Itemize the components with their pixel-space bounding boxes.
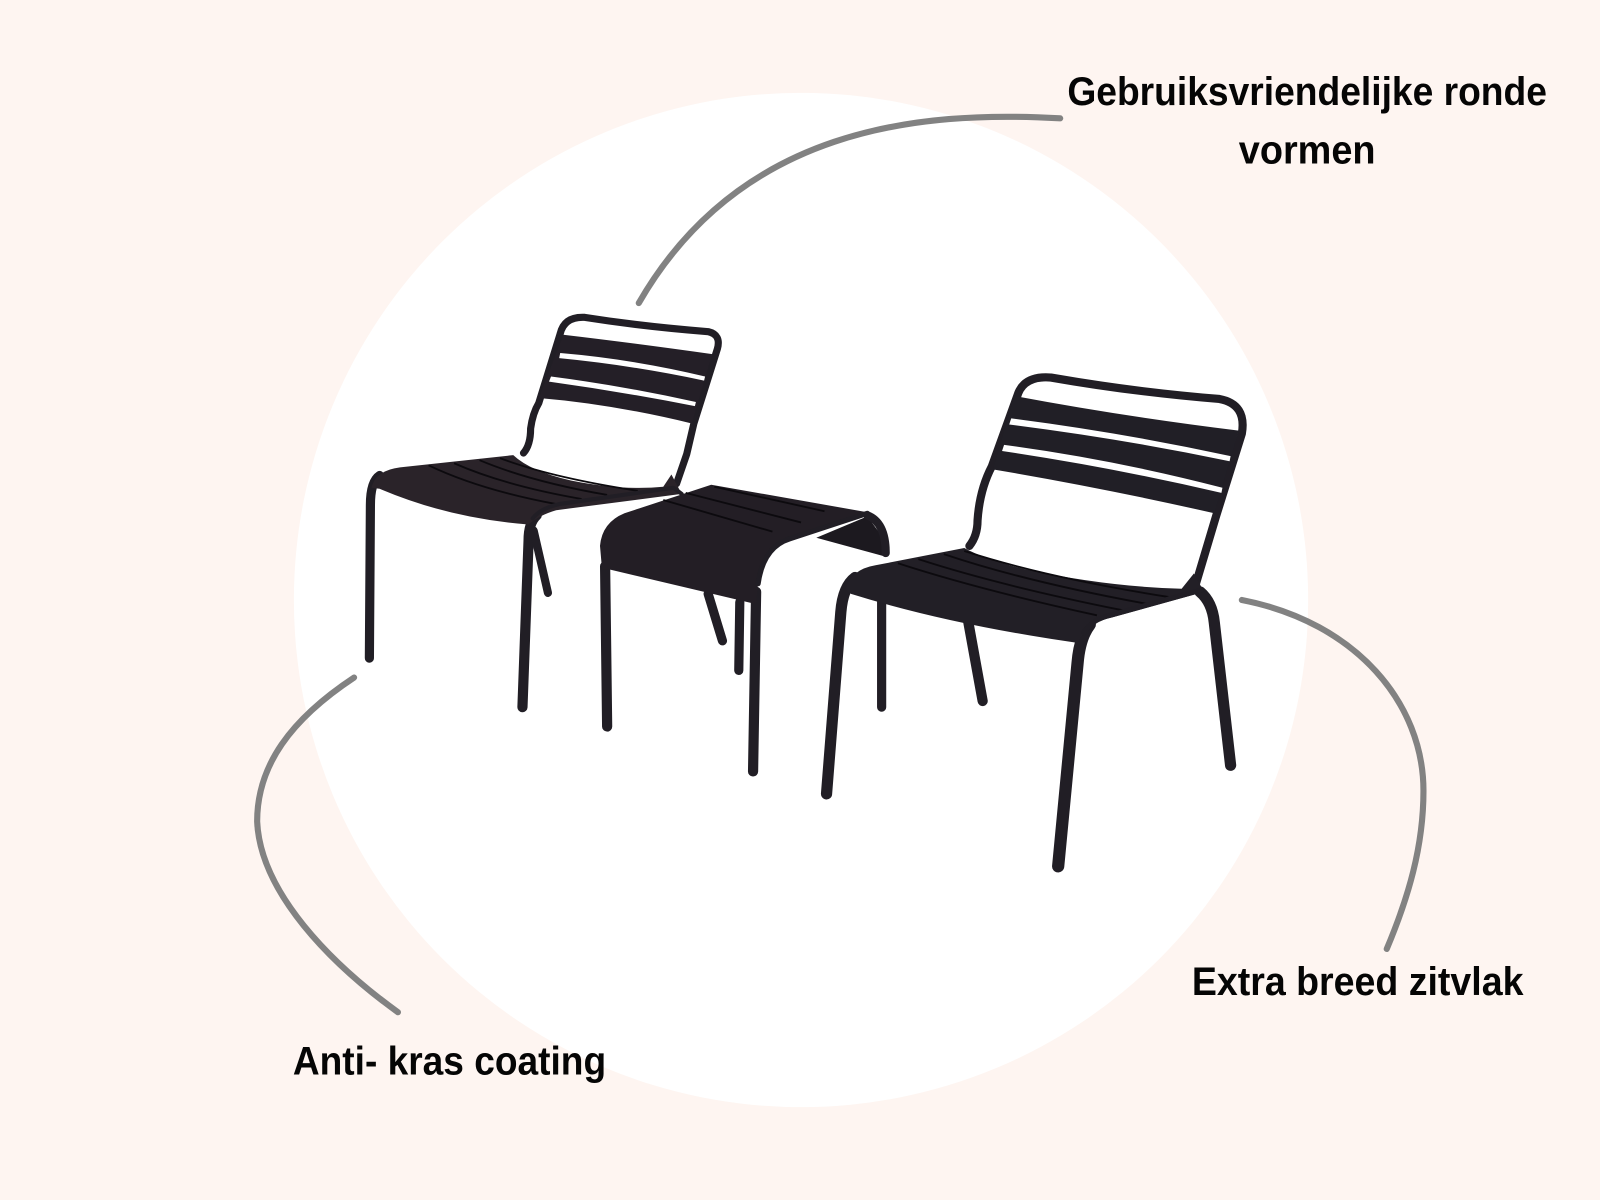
right chair seat	[845, 548, 1204, 643]
left chair	[369, 317, 718, 707]
right chair	[827, 377, 1243, 866]
table top	[600, 485, 886, 604]
label: wide seat: Extra breed zitvlak	[1192, 960, 1524, 1004]
label: anti-scratch coating: Anti- kras coating	[293, 1039, 606, 1083]
label: rounded shapes: vormen	[1239, 128, 1376, 172]
left chair back	[523, 317, 718, 484]
side table	[600, 485, 886, 771]
connector: right callout	[1242, 600, 1423, 949]
right chair back	[969, 377, 1243, 584]
connector: left callout	[257, 678, 398, 1012]
left chair legs	[369, 476, 548, 707]
label: rounded shapes: Gebruiksvriendelijke ronde	[1067, 70, 1547, 114]
table legs	[605, 566, 882, 771]
label: rounded shapes	[1067, 70, 1547, 172]
right chair legs	[827, 578, 1231, 866]
connector: top callout	[639, 117, 1060, 303]
white circle backdrop	[294, 93, 1308, 1107]
left chair seat	[371, 455, 682, 524]
